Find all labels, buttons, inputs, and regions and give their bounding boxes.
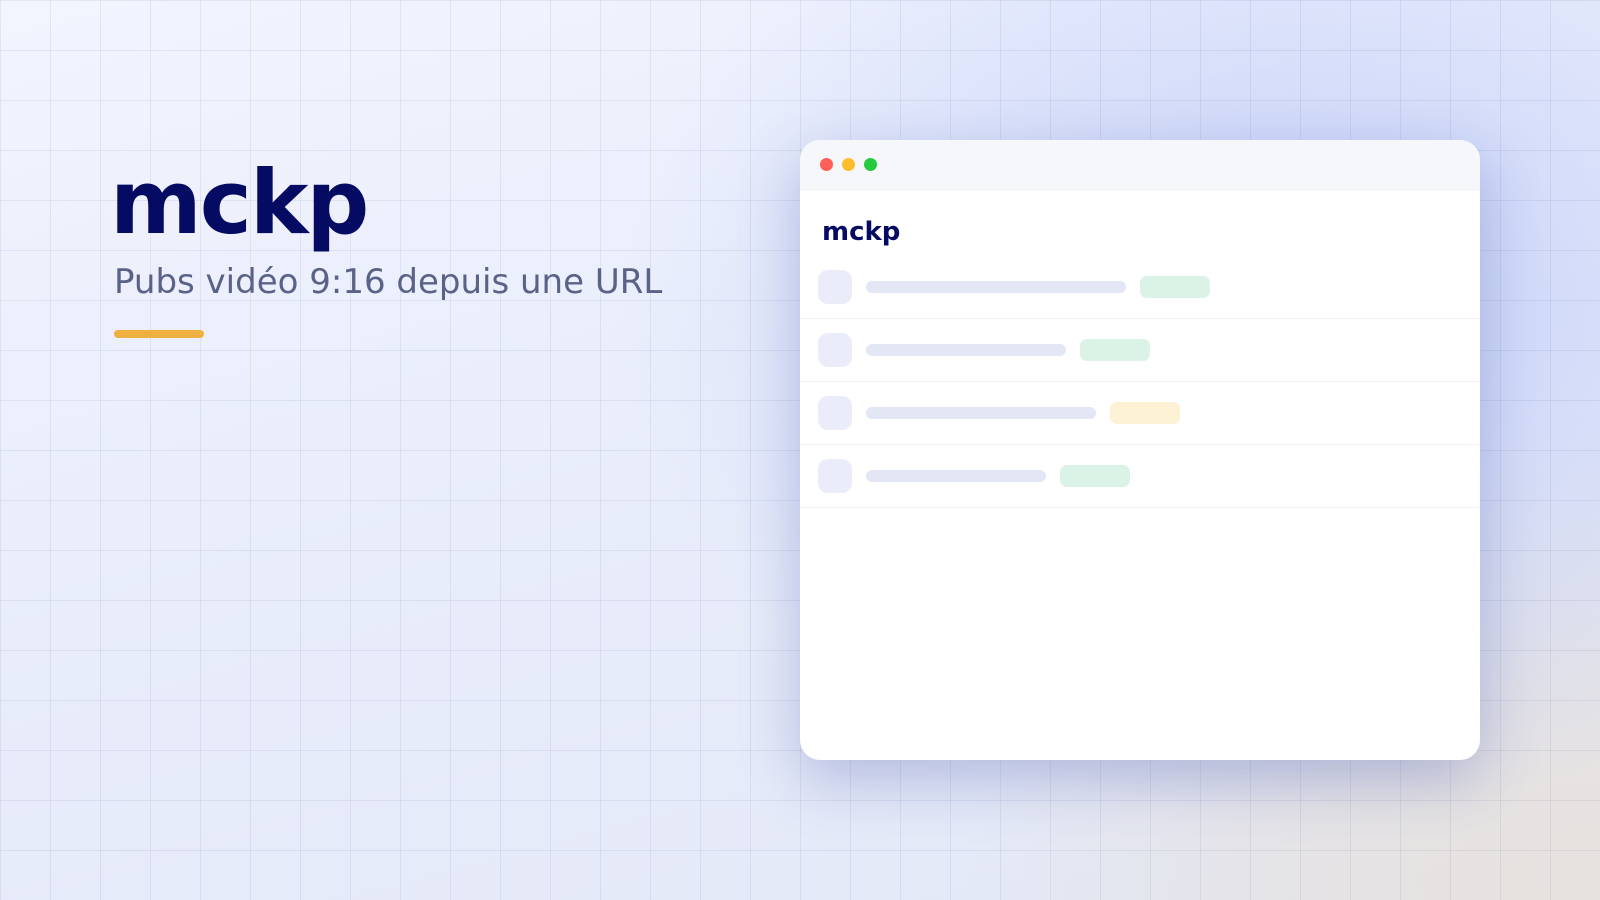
list row 3 bbox=[800, 389, 1480, 445]
row 1 thumbnail bbox=[818, 270, 852, 304]
icon: red window dot bbox=[820, 158, 833, 171]
icon: yellow window dot bbox=[842, 158, 855, 171]
title: mckp bbox=[110, 151, 367, 254]
list row 1 bbox=[800, 263, 1480, 319]
row 1 text placeholder bbox=[866, 281, 1126, 293]
row 1 status pill bbox=[1140, 276, 1210, 298]
accent bar bbox=[114, 330, 204, 338]
window logo text: mckp bbox=[822, 217, 900, 247]
row 4 status pill bbox=[1060, 465, 1130, 487]
icon: green window dot bbox=[864, 158, 877, 171]
row 3 text placeholder bbox=[866, 407, 1096, 419]
list row 2 bbox=[800, 326, 1480, 382]
list row 4 bbox=[800, 452, 1480, 508]
row 2 text placeholder bbox=[866, 344, 1066, 356]
row 2 thumbnail bbox=[818, 333, 852, 367]
row 4 text placeholder bbox=[866, 470, 1046, 482]
panel: browser window mockup bbox=[800, 140, 1480, 760]
row 2 status pill bbox=[1080, 339, 1150, 361]
row 3 thumbnail bbox=[818, 396, 852, 430]
window title bar bbox=[800, 140, 1480, 190]
row 4 thumbnail bbox=[818, 459, 852, 493]
subtitle: Pubs vidéo 9:16 depuis une URL bbox=[114, 262, 662, 302]
row 3 status pill bbox=[1110, 402, 1180, 424]
